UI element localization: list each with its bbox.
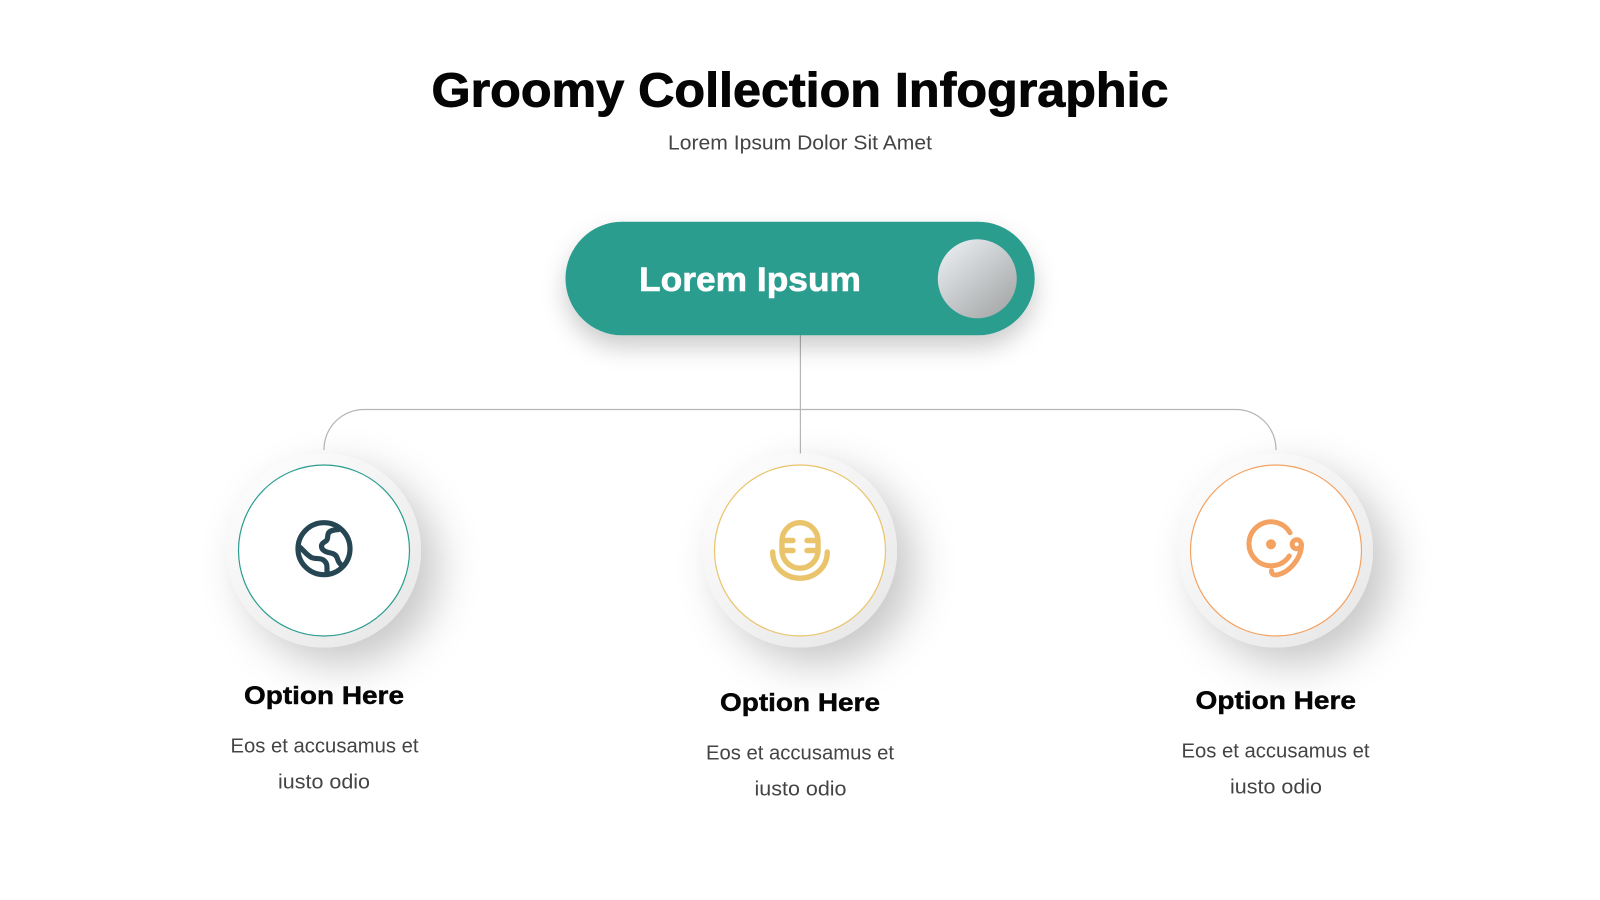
option 3: headset face	[1179, 454, 1373, 799]
icon: headset face	[1249, 522, 1302, 575]
subtitle: Lorem Ipsum Dolor Sit Amet	[668, 132, 932, 154]
option 1: globe	[227, 454, 421, 793]
option 1 text: iusto odio	[278, 770, 370, 793]
option 1 text	[230, 734, 419, 793]
connector lines	[324, 335, 1276, 454]
option 2 heading: Option Here	[720, 689, 880, 717]
option 3 text	[1182, 740, 1370, 799]
pill knob	[938, 239, 1017, 318]
icon: microphone	[773, 523, 827, 578]
option 3 text: iusto odio	[1230, 776, 1322, 799]
option 2 text	[706, 741, 894, 800]
option 2 text: iusto odio	[754, 777, 846, 800]
pill label: Lorem Ipsum	[639, 261, 861, 299]
option 1 heading: Option Here	[244, 682, 404, 710]
option 3 text: Eos et accusamus et	[1182, 740, 1370, 763]
icon: globe	[298, 523, 350, 575]
title: Groomy Collection Infographic	[432, 64, 1168, 118]
option 3 heading: Option Here	[1196, 687, 1356, 715]
option 1 text: Eos et accusamus et	[230, 734, 419, 757]
option 2 text: Eos et accusamus et	[706, 741, 894, 764]
main pill: Lorem Ipsum	[566, 222, 1035, 335]
option 2: microphone	[703, 454, 897, 800]
